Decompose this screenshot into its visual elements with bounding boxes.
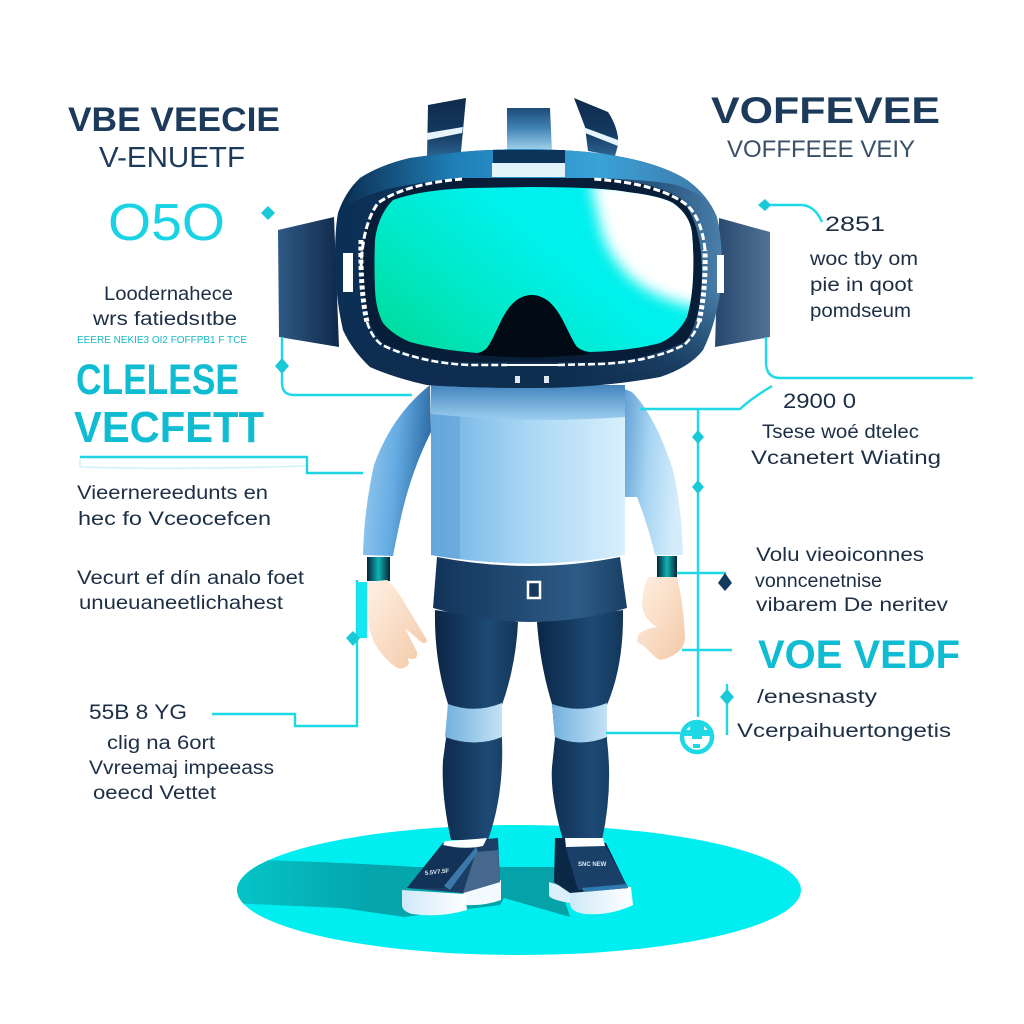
top straps	[427, 98, 618, 157]
left text block one: wrs fatiedsıtbe	[92, 309, 237, 330]
dashed ring	[361, 179, 705, 365]
left heading: V-ENUETF	[99, 142, 245, 174]
left text block two: hec fo Vceocefcen	[78, 509, 271, 530]
right text block one: pie in qoot	[810, 275, 914, 296]
side straps	[278, 217, 339, 347]
nose recess	[477, 295, 590, 357]
left text block four: clig na 6ort	[107, 733, 216, 754]
right text block four: /enesnasty	[757, 687, 878, 708]
left text block four	[89, 701, 274, 804]
headset shell	[335, 149, 722, 388]
left text block four: 55B 8 YG	[89, 701, 187, 724]
floor platform	[230, 825, 801, 955]
right text block three: vibarem De neritev	[756, 595, 949, 616]
left text block three	[77, 568, 305, 614]
right text block four	[737, 687, 951, 742]
left leg	[435, 610, 518, 840]
left text block one: EEERE NEKIE3 OI2 FOFFPB1 F TCE	[77, 334, 247, 346]
left text block four: oeecd Vettet	[93, 783, 217, 804]
right heading	[711, 90, 940, 163]
right text block one	[809, 213, 918, 322]
connector lines	[80, 205, 973, 735]
right shoe	[549, 838, 633, 914]
shell lower shade	[335, 149, 722, 388]
icon: circular badge	[682, 722, 712, 752]
shorts pocket tag	[528, 582, 540, 598]
right text block two: 2900 0	[783, 390, 856, 413]
shorts	[433, 557, 627, 622]
left text block three: unueuaneetlichahest	[79, 593, 284, 614]
right text block two: Vcanetert Wiating	[751, 448, 941, 469]
top bracket	[492, 150, 565, 177]
left big number: O5O	[108, 194, 225, 252]
left text block three: Vecurt ef dín analo foet	[77, 568, 305, 589]
right text block one: 2851	[825, 213, 885, 236]
shoe lettering: SNC NEW	[578, 862, 607, 868]
VR headset	[278, 98, 770, 388]
left cyan heading: VECFETT	[74, 403, 264, 452]
right text block four: Vcerpaihuertongetis	[737, 721, 951, 742]
right side tab	[717, 255, 724, 293]
left text block one	[77, 284, 247, 346]
lens	[374, 187, 694, 353]
left arm	[363, 385, 431, 556]
lens glare	[590, 180, 710, 310]
left cyan heading	[74, 356, 264, 452]
left cuff	[367, 557, 390, 581]
left text block two: Vieernereedunts en	[77, 483, 268, 504]
shell top band	[348, 149, 706, 205]
left hand	[367, 580, 427, 668]
left shoe	[402, 838, 501, 915]
right text block three: Volu vieoiconnes	[756, 545, 924, 566]
left side tab	[343, 253, 353, 292]
torso	[431, 385, 625, 564]
left heading: VBE VEECIE	[68, 101, 280, 139]
right arm	[622, 388, 683, 555]
left text block four: Vvreemaj impeeass	[89, 758, 274, 779]
left text block two	[77, 483, 271, 530]
left heading	[68, 101, 280, 174]
right hand	[637, 577, 685, 660]
left cyan heading: CLELESE	[76, 356, 239, 404]
right text block two: Tsese woé dtelec	[762, 422, 919, 443]
lens surround	[361, 178, 702, 362]
right text block two	[751, 390, 941, 469]
right heading: VOFFEVEE	[711, 90, 940, 131]
right cuff	[657, 556, 677, 577]
right cyan heading: VOE VEDF	[758, 633, 960, 677]
right text block one: pomdseum	[810, 301, 911, 322]
diamond markers	[261, 199, 771, 705]
right text block three: vonncenetnise	[755, 571, 882, 592]
left text block one: Loodernahece	[104, 284, 233, 305]
right heading: VOFFFEEE VEIY	[727, 136, 915, 163]
right text block three	[755, 545, 949, 616]
right leg	[537, 610, 623, 840]
character figure	[363, 385, 685, 915]
infographic canvas	[68, 97, 973, 955]
shoe lettering: 5.5V7.5F	[425, 868, 450, 877]
right text block one: woc tby om	[809, 249, 918, 270]
bottom marks	[515, 376, 549, 383]
